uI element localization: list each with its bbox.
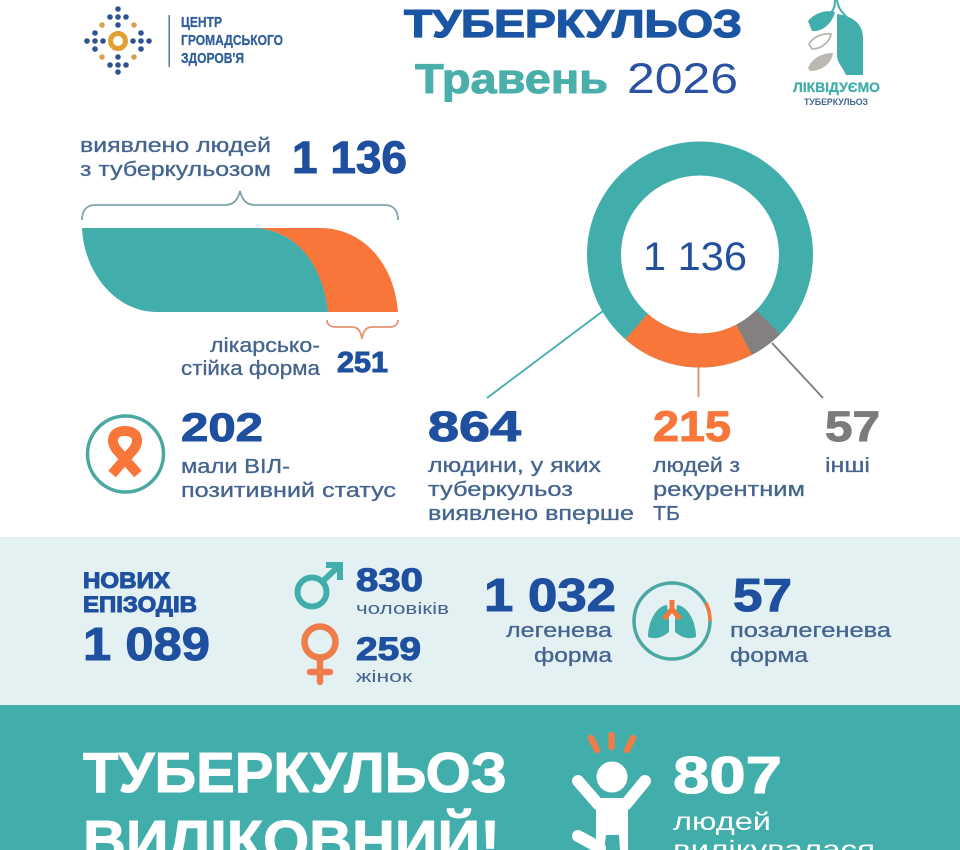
stat: HIV: 202 bbox=[181, 406, 263, 450]
icon: joyful person bbox=[578, 735, 645, 850]
new episodes total: 1 089 bbox=[83, 618, 210, 670]
stat: other: інші bbox=[825, 455, 870, 477]
detected people text: виявлено людей bbox=[80, 135, 271, 157]
detected people text: з туберкульозом bbox=[80, 159, 271, 181]
donut chart bbox=[604, 158, 796, 350]
stat: new cases: туберкульоз bbox=[428, 479, 573, 501]
stat: new cases: людини, у яких bbox=[428, 455, 601, 477]
footer heading bbox=[83, 741, 507, 850]
logo: public health center bbox=[84, 6, 283, 75]
detected people text: 1 136 bbox=[292, 132, 407, 183]
stat: pulmonary: форма bbox=[534, 645, 613, 667]
drug-resistant label: лікарсько- bbox=[210, 335, 320, 357]
stat: cured bbox=[673, 747, 875, 850]
stat: men bbox=[356, 562, 449, 618]
icon: lungs bbox=[634, 583, 710, 659]
footer heading: ТУБЕРКУЛЬОЗ bbox=[83, 741, 507, 805]
stat: men: чоловіків bbox=[356, 599, 449, 618]
stat: new cases: виявлено вперше bbox=[428, 503, 634, 525]
stat: women: жінок bbox=[356, 667, 413, 686]
detected people text bbox=[80, 132, 407, 183]
stat: pulmonary: 1 032 bbox=[484, 569, 616, 621]
logo: eliminate tuberculosis: ЛІКВІДУЄМО bbox=[793, 79, 880, 95]
new episodes total: НОВИХ bbox=[83, 568, 170, 593]
logo: public health center: ЗДОРОВ'Я bbox=[181, 50, 244, 67]
stat: HIV bbox=[181, 406, 396, 502]
panel: treatment footer bbox=[0, 705, 960, 850]
stat: extrapulmonary: форма bbox=[730, 645, 809, 667]
brace: total bbox=[82, 191, 398, 220]
stat: recurrent: ТБ bbox=[653, 503, 680, 525]
new episodes total: ЕПІЗОДІВ bbox=[83, 592, 197, 617]
panel: new episodes band bbox=[0, 537, 960, 705]
stat: recurrent: рекурентним bbox=[653, 479, 805, 501]
stat: other bbox=[825, 403, 880, 477]
logo: eliminate tuberculosis bbox=[793, 0, 880, 107]
brace: drug-resistant bbox=[327, 320, 398, 339]
logo: eliminate tuberculosis: ТУБЕРКУЛЬОЗ bbox=[804, 97, 868, 107]
stat: women bbox=[356, 631, 421, 686]
title: 2026 bbox=[627, 55, 738, 103]
stat: new cases: 864 bbox=[428, 403, 521, 451]
stat: women: 259 bbox=[356, 631, 421, 667]
leader lines bbox=[487, 311, 823, 398]
icon: awareness ribbon bbox=[88, 416, 164, 492]
stat: men: 830 bbox=[356, 562, 423, 598]
stat: pulmonary bbox=[484, 569, 616, 667]
stat: pulmonary: легенева bbox=[506, 620, 613, 642]
stat: cured: 807 bbox=[673, 747, 782, 805]
stat: recurrent bbox=[653, 403, 805, 525]
title bbox=[404, 3, 742, 103]
logo: public health center: ГРОМАДСЬКОГО bbox=[181, 32, 283, 49]
title: Травень bbox=[415, 55, 608, 102]
stat: extrapulmonary: 57 bbox=[733, 569, 792, 621]
stat: extrapulmonary: позалегенева bbox=[730, 620, 892, 642]
stat: other: 57 bbox=[825, 403, 880, 451]
donut chart: 1 136 bbox=[643, 235, 747, 279]
stat: recurrent: людей з bbox=[653, 455, 740, 477]
stat: new cases bbox=[428, 403, 634, 525]
drug-resistance bar bbox=[82, 228, 398, 312]
stat: HIV: позитивний статус bbox=[181, 480, 396, 502]
stat: HIV: мали ВІЛ- bbox=[181, 456, 290, 478]
icon: male bbox=[298, 565, 340, 606]
new episodes total bbox=[83, 568, 210, 670]
stat: cured: людей bbox=[673, 808, 771, 836]
title: ТУБЕРКУЛЬОЗ bbox=[404, 3, 742, 46]
stat: recurrent: 215 bbox=[653, 403, 731, 451]
logo: public health center: ЦЕНТР bbox=[181, 14, 222, 31]
drug-resistant label: 251 bbox=[337, 347, 388, 379]
drug-resistant label bbox=[181, 335, 388, 380]
icon: female bbox=[304, 626, 336, 682]
drug-resistant label: стійка форма bbox=[181, 358, 321, 380]
stat: extrapulmonary bbox=[730, 569, 892, 667]
